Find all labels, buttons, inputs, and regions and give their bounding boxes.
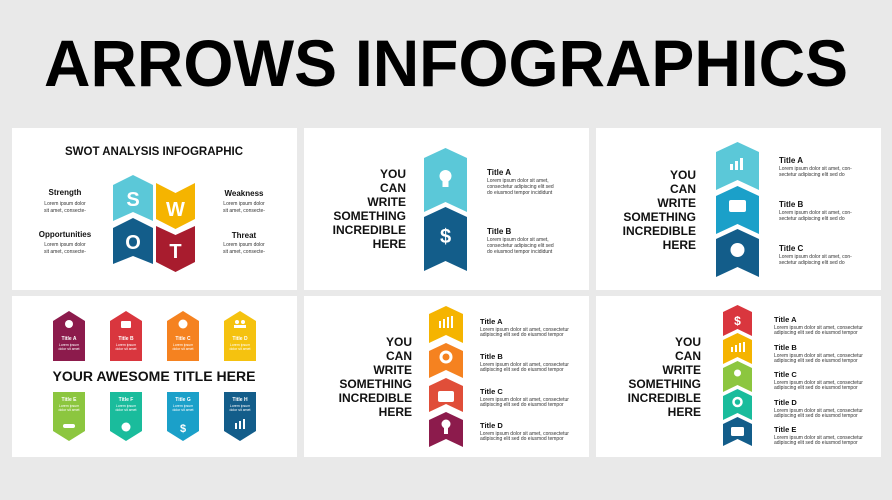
panel: two arrows	[304, 128, 589, 290]
top row tags	[53, 311, 256, 361]
item: title A: adipiscing elit sed do eiusmod tempor	[774, 330, 858, 336]
top row tags: Lorem ipsum	[173, 343, 193, 347]
bottom row tags: Title F	[119, 397, 133, 403]
item: title D: Title D	[774, 398, 797, 407]
bottom row tags: dolor sit amet	[172, 408, 194, 412]
title: ARROWS INFOGRAPHICS	[44, 26, 848, 100]
headline text: CAN	[675, 349, 701, 363]
item: title C	[774, 370, 863, 391]
top row tags: Title A	[61, 336, 77, 342]
item: title A: sectetur adipiscing elit sed do	[779, 172, 845, 178]
headline text: CAN	[380, 181, 406, 195]
label: strength: Lorem ipsum dolor	[44, 201, 86, 207]
item: title C: Title C	[774, 370, 797, 379]
headline text	[339, 335, 412, 419]
item: title A	[487, 168, 554, 196]
awesome title: YOUR AWESOME TITLE HERE	[52, 369, 256, 384]
headline text: YOU	[380, 167, 406, 181]
headline text: HERE	[668, 405, 701, 419]
headline text: YOU	[670, 168, 696, 182]
swot shapes: O	[125, 232, 141, 254]
arrow stack	[716, 142, 759, 277]
label: strength	[44, 188, 86, 214]
item: title A: do eiusmod tempor incididunt	[487, 190, 553, 196]
swot shapes: W	[166, 199, 185, 221]
headline text: HERE	[373, 237, 406, 251]
item: title B: Lorem ipsum dolor sit amet, con-	[779, 210, 852, 216]
item: title B: Title B	[779, 200, 804, 209]
item: title A: Title A	[480, 317, 503, 326]
label: strength: Strength	[49, 188, 82, 197]
item: title B	[774, 343, 863, 364]
bottom row tags: dolor sit amet	[229, 408, 251, 412]
item: title E: Title E	[774, 425, 796, 434]
panel: three arrows	[596, 128, 881, 290]
item: title B: consectetur adipiscing elit sed	[487, 243, 554, 249]
headline text: SOMETHING	[628, 377, 701, 391]
label: weakness: Weakness	[224, 189, 264, 198]
headline text: CAN	[386, 349, 412, 363]
item: title C: Lorem ipsum dolor sit amet, consectetur	[480, 397, 569, 403]
item: title A	[480, 317, 569, 338]
item: title C	[779, 244, 852, 266]
bottom row tags: $	[180, 423, 186, 435]
top row tags: dolor sit amet	[172, 347, 194, 351]
headline text	[623, 168, 696, 252]
item: title A: Lorem ipsum dolor sit amet,	[487, 178, 549, 184]
item: title B	[779, 200, 852, 222]
headline text: SOMETHING	[333, 209, 406, 223]
bottom row tags: Title H	[232, 397, 248, 403]
top row tags: Lorem ipsum	[230, 343, 250, 347]
top row tags: Title C	[175, 336, 191, 342]
item: title A: Lorem ipsum dolor sit amet, consectetur	[480, 327, 569, 333]
headline text: YOU	[386, 335, 412, 349]
item: title C: Lorem ipsum dolor sit amet, consectetur	[774, 380, 863, 386]
label: threat: Lorem ipsum dolor	[223, 242, 265, 248]
item: title E	[774, 425, 863, 446]
item: title D: Lorem ipsum dolor sit amet, consectetur	[774, 408, 863, 414]
headline text: YOU	[675, 335, 701, 349]
top row tags: Title B	[118, 336, 134, 342]
headline text: HERE	[379, 405, 412, 419]
label: opportunities: Lorem ipsum dolor	[44, 242, 86, 248]
headline text: SOMETHING	[339, 377, 412, 391]
headline text: HERE	[663, 238, 696, 252]
bottom row tags: Lorem ipsum	[230, 404, 250, 408]
item: title A: Title A	[779, 156, 803, 165]
item: title A: Lorem ipsum dolor sit amet, consectetur	[774, 325, 863, 331]
headline text: WRITE	[373, 363, 412, 377]
headline text	[333, 167, 406, 251]
headline text: INCREDIBLE	[333, 223, 406, 237]
item: title C: Lorem ipsum dolor sit amet, con-	[779, 254, 852, 260]
arrow stack	[429, 306, 463, 447]
top row tags: Lorem ipsum	[116, 343, 136, 347]
label: opportunities: sit amet, consecte-	[44, 249, 86, 255]
item: title B: adipiscing elit sed do eiusmod tempor	[480, 367, 564, 373]
label: opportunities	[39, 230, 92, 255]
item: title D: Title D	[480, 421, 503, 430]
top row tags: dolor sit amet	[58, 347, 80, 351]
bottom row tags: Lorem ipsum	[59, 404, 79, 408]
headline text: CAN	[670, 182, 696, 196]
panel: five arrows	[596, 296, 881, 457]
swot shapes: S	[126, 189, 140, 211]
item: title A: consectetur adipiscing elit sed	[487, 184, 554, 190]
item: title C: Title C	[480, 387, 503, 396]
item: title D: adipiscing elit sed do eiusmod tempor	[774, 413, 858, 419]
label: opportunities: Opportunities	[39, 230, 92, 239]
item: title B: Lorem ipsum dolor sit amet,	[487, 237, 549, 243]
item: title A	[779, 156, 852, 178]
label: strength: sit amet, consecte-	[44, 208, 86, 214]
item: title D	[774, 398, 863, 419]
headline text: INCREDIBLE	[623, 224, 696, 238]
bottom row tags: Title G	[175, 397, 191, 403]
arrow stack: $	[734, 314, 741, 328]
item: title B: do eiusmod tempor incididunt	[487, 249, 553, 255]
top row tags: Title D	[232, 336, 248, 342]
item: title A: adipiscing elit sed do eiusmod tempor	[480, 332, 564, 338]
label: weakness: Lorem ipsum dolor	[223, 201, 265, 207]
item: title B: Lorem ipsum dolor sit amet, consectetur	[480, 362, 569, 368]
top row tags: dolor sit amet	[115, 347, 137, 351]
headline text: WRITE	[662, 363, 701, 377]
label: weakness	[223, 189, 265, 214]
item: title C	[480, 387, 569, 408]
item: title B: Title B	[480, 352, 503, 361]
item: title B: sectetur adipiscing elit sed do	[779, 216, 845, 222]
panel: eight tags	[12, 296, 297, 457]
item: title C: sectetur adipiscing elit sed do	[779, 260, 845, 266]
item: title A: Title A	[487, 168, 511, 177]
swot shapes: T	[169, 241, 182, 263]
item: title B	[487, 227, 554, 255]
arrow stack	[424, 148, 467, 271]
arrow stack	[723, 305, 752, 446]
label: weakness: sit amet, consecte-	[223, 208, 265, 214]
item: title B: Title B	[774, 343, 797, 352]
bottom row tags: dolor sit amet	[115, 408, 137, 412]
item: title E: Lorem ipsum dolor sit amet, consectetur	[774, 435, 863, 441]
bottom row tags: Title E	[62, 397, 77, 403]
headline text: INCREDIBLE	[339, 391, 412, 405]
item: title A: Title A	[774, 315, 797, 324]
panel: swot	[12, 128, 297, 290]
item: title A	[774, 315, 863, 336]
item: title A: Lorem ipsum dolor sit amet, con-	[779, 166, 852, 172]
label: threat: Threat	[232, 231, 257, 240]
bottom row tags: dolor sit amet	[58, 408, 80, 412]
item: title E: adipiscing elit sed do eiusmod tempor	[774, 440, 858, 446]
bottom row tags	[53, 392, 256, 441]
item: title B: adipiscing elit sed do eiusmod tempor	[774, 358, 858, 364]
item: title D: Lorem ipsum dolor sit amet, consectetur	[480, 431, 569, 437]
headline text: SOMETHING	[623, 210, 696, 224]
headline text: INCREDIBLE	[628, 391, 701, 405]
item: title D	[480, 421, 569, 442]
item: title B: Title B	[487, 227, 512, 236]
item: title C: adipiscing elit sed do eiusmod tempor	[480, 402, 564, 408]
arrow stack: $	[440, 226, 451, 248]
item: title D: adipiscing elit sed do eiusmod tempor	[480, 436, 564, 442]
item: title C: Title C	[779, 244, 804, 253]
headline text: WRITE	[657, 196, 696, 210]
item: title B	[480, 352, 569, 373]
item: title C: adipiscing elit sed do eiusmod tempor	[774, 385, 858, 391]
label: threat	[223, 231, 265, 255]
top row tags: dolor sit amet	[229, 347, 251, 351]
bottom row tags: Lorem ipsum	[173, 404, 193, 408]
item: title B: Lorem ipsum dolor sit amet, consectetur	[774, 353, 863, 359]
top row tags: Lorem ipsum	[59, 343, 79, 347]
swot shapes	[113, 175, 195, 272]
swot heading: SWOT ANALYSIS INFOGRAPHIC	[65, 146, 243, 158]
headline text: WRITE	[367, 195, 406, 209]
headline text	[628, 335, 701, 419]
label: threat: sit amet, consecte-	[223, 249, 265, 255]
panel: four arrows	[304, 296, 589, 457]
bottom row tags: Lorem ipsum	[116, 404, 136, 408]
